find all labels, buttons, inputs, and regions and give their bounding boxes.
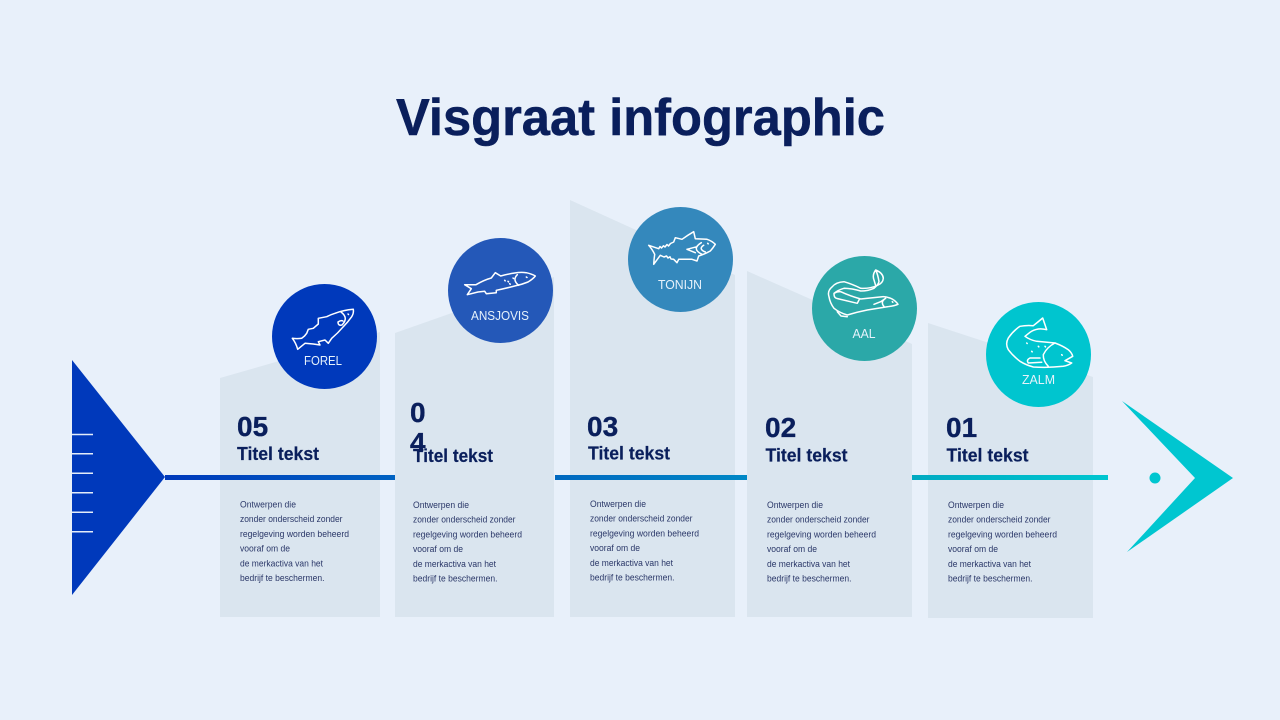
- body text: Ontwerpen die: [240, 500, 296, 510]
- heading: Titel tekst: [237, 444, 319, 464]
- panel backgrounds: [220, 200, 1093, 618]
- icon: salmon: [1007, 318, 1073, 367]
- body text: vooraf om de: [948, 544, 998, 554]
- body text: regelgeving worden beheerd: [413, 529, 522, 539]
- number 04 (wrapped): 0: [410, 397, 426, 428]
- heading: Titel tekst: [588, 444, 670, 464]
- number 05: 05: [237, 411, 268, 442]
- body text: zonder onderscheid zonder: [948, 515, 1050, 525]
- title: Visgraat infographic: [396, 89, 885, 147]
- body text: bedrijf te beschermen.: [948, 574, 1032, 584]
- body text: [240, 500, 349, 583]
- badge: ansjovis: ANSJOVIS: [471, 309, 529, 323]
- fish spine: [165, 475, 1108, 480]
- body text: vooraf om de: [767, 544, 817, 554]
- step 02: aal: [765, 256, 917, 584]
- body text: zonder onderscheid zonder: [590, 514, 692, 524]
- body text: zonder onderscheid zonder: [240, 514, 342, 524]
- body text: de merkactiva van het: [767, 559, 850, 569]
- number 03: 03: [587, 411, 618, 442]
- number 02: 02: [765, 412, 796, 443]
- icon: trout: [292, 309, 353, 349]
- badge: zalm: ZALM: [1022, 373, 1055, 387]
- fish tail fin with ribs: [72, 360, 165, 595]
- body text: bedrijf te beschermen.: [767, 574, 852, 584]
- body text: zonder onderscheid zonder: [767, 515, 870, 525]
- badge: forel: [272, 284, 377, 389]
- body text: [948, 500, 1057, 584]
- body text: regelgeving worden beheerd: [590, 528, 699, 538]
- fish head arrow with eye: [1122, 401, 1233, 552]
- body text: de merkactiva van het: [590, 558, 673, 568]
- heading: Titel tekst: [766, 446, 848, 466]
- badge: aal: [812, 256, 917, 361]
- body text: bedrijf te beschermen.: [590, 572, 674, 582]
- body text: zonder onderscheid zonder: [413, 515, 516, 525]
- body text: vooraf om de: [590, 543, 640, 553]
- badge: tonijn: [628, 207, 733, 312]
- icon: anchovy: [465, 272, 535, 295]
- body text: [413, 500, 522, 584]
- step 04: ansjovis: [410, 238, 553, 584]
- body text: regelgeving worden beheerd: [767, 529, 876, 539]
- step 01: zalm: [946, 302, 1091, 584]
- badge: ansjovis: [448, 238, 553, 343]
- number 04 (wrapped): 4: [410, 427, 426, 458]
- body text: de merkactiva van het: [413, 559, 496, 569]
- step 05: forel: [237, 284, 377, 583]
- body text: Ontwerpen die: [948, 500, 1004, 510]
- badge: aal: AAL: [852, 327, 876, 341]
- body text: de merkactiva van het: [240, 558, 323, 568]
- body text: de merkactiva van het: [948, 559, 1031, 569]
- body text: Ontwerpen die: [767, 500, 823, 510]
- number 01: 01: [946, 412, 977, 443]
- number 04 (wrapped): [410, 397, 426, 458]
- body text: [590, 499, 699, 582]
- body text: [767, 500, 876, 584]
- body text: Ontwerpen die: [413, 500, 469, 510]
- icon: eel: [828, 270, 898, 317]
- body text: vooraf om de: [240, 544, 290, 554]
- badge: tonijn: TONIJN: [658, 278, 702, 292]
- badge: forel: FOREL: [304, 354, 342, 368]
- heading: Titel tekst: [413, 446, 493, 466]
- body text: bedrijf te beschermen.: [240, 573, 324, 583]
- step 03: tonijn: [587, 207, 733, 582]
- body text: regelgeving worden beheerd: [948, 529, 1057, 539]
- badge: zalm: [986, 302, 1091, 407]
- body text: regelgeving worden beheerd: [240, 529, 349, 539]
- heading: Titel tekst: [946, 446, 1029, 466]
- body text: bedrijf te beschermen.: [413, 574, 498, 584]
- body text: Ontwerpen die: [590, 499, 646, 509]
- body text: vooraf om de: [413, 544, 463, 554]
- icon: tuna: [649, 232, 715, 264]
